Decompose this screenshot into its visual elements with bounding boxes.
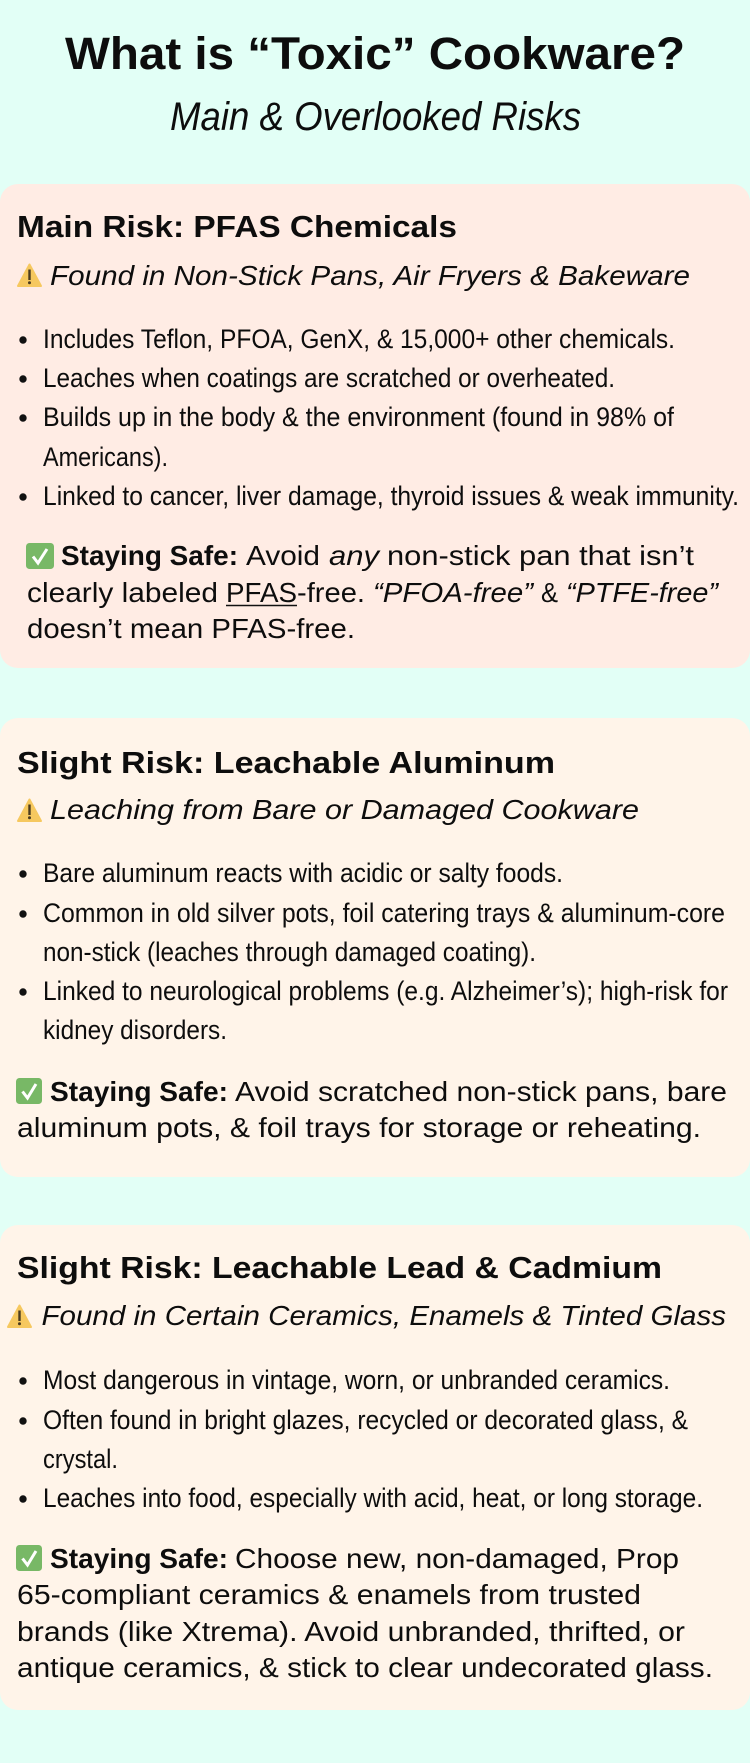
- icon: warning: [18, 800, 41, 821]
- callout: staying safe: non-stick pan that isn’t: [387, 540, 694, 571]
- callout: staying safe: brands (like Xtrema). Avoid unbranded, thrifted, or: [17, 1616, 685, 1647]
- bullet list: lead and cadmium facts: Leaches into food, especially with acid, heat, or long storage.: [43, 1483, 703, 1513]
- bullet list: PFAS facts: Americans).: [43, 442, 168, 472]
- callout: staying safe: Staying Safe:: [50, 1543, 228, 1574]
- bullet list: aluminum facts: Common in old silver pots, foil catering trays & aluminum-core: [43, 898, 725, 928]
- title: What is “Toxic” Cookware?: [65, 28, 685, 79]
- icon: warning: [18, 264, 41, 286]
- callout: staying safe: 65-compliant ceramics & enamels from trusted: [17, 1579, 641, 1610]
- bullet list: lead and cadmium facts: Often found in bright glazes, recycled or decorated glass, &: [43, 1405, 688, 1435]
- bullet list: lead and cadmium facts: Most dangerous in vintage, worn, or unbranded ceramics.: [43, 1365, 670, 1395]
- callout: staying safe: &: [541, 577, 558, 608]
- subheading: where lead and cadmium are found: Found in Certain Ceramics, Enamels & Tinted Glass: [42, 1300, 726, 1331]
- bullet list: aluminum facts: Bare aluminum reacts with acidic or salty foods.: [43, 858, 563, 888]
- bullet list: aluminum facts: non-stick (leaches through damaged coating).: [43, 937, 536, 967]
- bullet list: PFAS facts: Includes Teflon, PFOA, GenX, & 15,000+ other chemicals.: [43, 324, 675, 354]
- bullet list: PFAS facts: [19, 324, 739, 511]
- callout: staying safe: Staying Safe:: [50, 1076, 228, 1107]
- subheading: aluminum leaching source: Leaching from Bare or Damaged Cookware: [50, 794, 639, 825]
- icon: check mark: [26, 543, 54, 569]
- icon: check mark: [16, 1545, 42, 1571]
- panel: slight risk leachable aluminum: [0, 718, 750, 1177]
- bullet list: PFAS facts: Leaches when coatings are scratched or overheated.: [43, 363, 615, 393]
- bullet list: aluminum facts: kidney disorders.: [43, 1015, 227, 1045]
- callout: staying safe: “PTFE-free”: [566, 577, 720, 608]
- callout: staying safe: PFAS: [226, 577, 297, 608]
- callout: staying safe: [17, 1076, 727, 1143]
- panel: slight risk leachable lead and cadmium: [0, 1225, 750, 1710]
- heading: lead and cadmium: Slight Risk: Leachable Lead & Cadmium: [17, 1251, 662, 1285]
- callout: staying safe: clearly labeled: [27, 577, 218, 608]
- callout: staying safe: -free.: [297, 577, 365, 608]
- subheading: where PFAS is found: Found in Non-Stick Pans, Air Fryers & Bakeware: [50, 260, 690, 291]
- icon: warning: [8, 1306, 31, 1327]
- panel: main risk PFAS chemicals: [0, 184, 750, 668]
- callout: staying safe: “PFOA-free”: [373, 577, 535, 608]
- heading: aluminum: Slight Risk: Leachable Aluminum: [17, 746, 555, 780]
- callout: staying safe: Staying Safe:: [61, 540, 238, 571]
- callout: staying safe: doesn’t mean PFAS-free.: [27, 613, 355, 644]
- callout: staying safe: [27, 540, 720, 644]
- callout: staying safe: antique ceramics, & stick to clear undecorated glass.: [17, 1652, 713, 1683]
- bullet list: PFAS facts: Builds up in the body & the environment (found in 98% of: [43, 402, 675, 432]
- callout: staying safe: aluminum pots, & foil trays for storage or reheating.: [17, 1112, 701, 1143]
- subtitle: Main & Overlooked Risks: [170, 95, 581, 139]
- bullet list: aluminum facts: [19, 858, 728, 1045]
- bullet list: lead and cadmium facts: crystal.: [43, 1444, 118, 1474]
- callout: staying safe: Avoid scratched non-stick pans, bare: [235, 1076, 727, 1107]
- bullet list: lead and cadmium facts: [19, 1365, 703, 1513]
- callout: staying safe: [17, 1543, 713, 1683]
- icon: check mark: [16, 1078, 42, 1104]
- callout: staying safe: Avoid: [246, 540, 320, 571]
- callout: staying safe: any: [329, 540, 382, 571]
- callout: staying safe: Choose new, non-damaged, Prop: [235, 1543, 679, 1574]
- heading: PFAS: Main Risk: PFAS Chemicals: [17, 210, 457, 244]
